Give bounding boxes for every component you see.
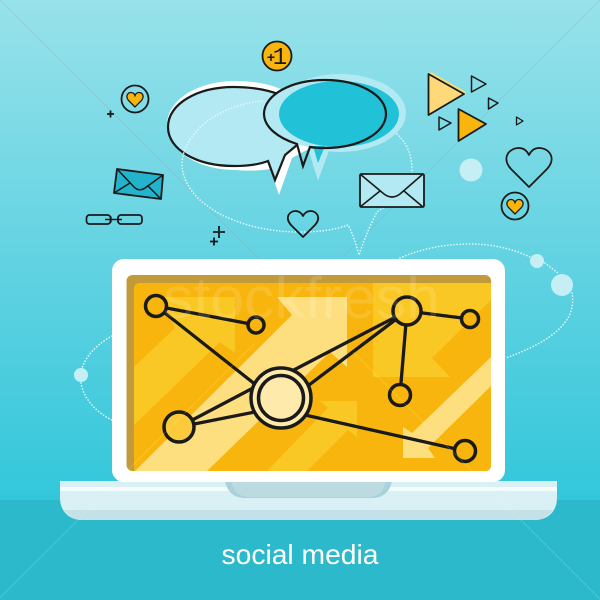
badge: +1 xyxy=(262,42,292,72)
icon: plus small xyxy=(107,110,114,118)
network lines xyxy=(156,306,470,451)
icon: heart outline center xyxy=(288,211,318,237)
icon: teal envelope xyxy=(114,169,163,199)
dotted outline: left arc xyxy=(81,336,112,420)
icon: heart in circle left xyxy=(122,86,148,112)
icon: heart outline right xyxy=(506,148,552,187)
dotted outline: right network arc xyxy=(400,244,573,358)
icon: chain link xyxy=(86,215,142,224)
badge: +1: 1 xyxy=(273,45,287,72)
screen arrow: lower middle xyxy=(267,401,357,471)
decorative circles xyxy=(74,158,573,382)
speech bubble: white outlined xyxy=(167,81,312,195)
watermark: stockfresh xyxy=(163,266,440,331)
title: social media xyxy=(222,539,379,570)
laptop base xyxy=(60,481,557,520)
network nodes xyxy=(146,296,478,462)
icon: plus pair xyxy=(210,226,225,246)
laptop lid xyxy=(112,259,505,482)
screen arrow: lower right pale xyxy=(403,357,491,458)
badge: +1: + xyxy=(267,49,275,65)
dotted outline: large speech bubble xyxy=(182,101,412,255)
screen arrow: left xyxy=(134,297,235,425)
icon: white envelope xyxy=(360,174,424,207)
screen arrow: top right xyxy=(373,283,491,377)
screen arrow: main pale xyxy=(135,297,347,471)
icon: play triangles xyxy=(428,72,523,141)
speech bubble: teal xyxy=(264,74,406,181)
icon: heart in circle right xyxy=(502,192,528,220)
laptop screen xyxy=(126,275,491,471)
floor band xyxy=(0,500,600,600)
